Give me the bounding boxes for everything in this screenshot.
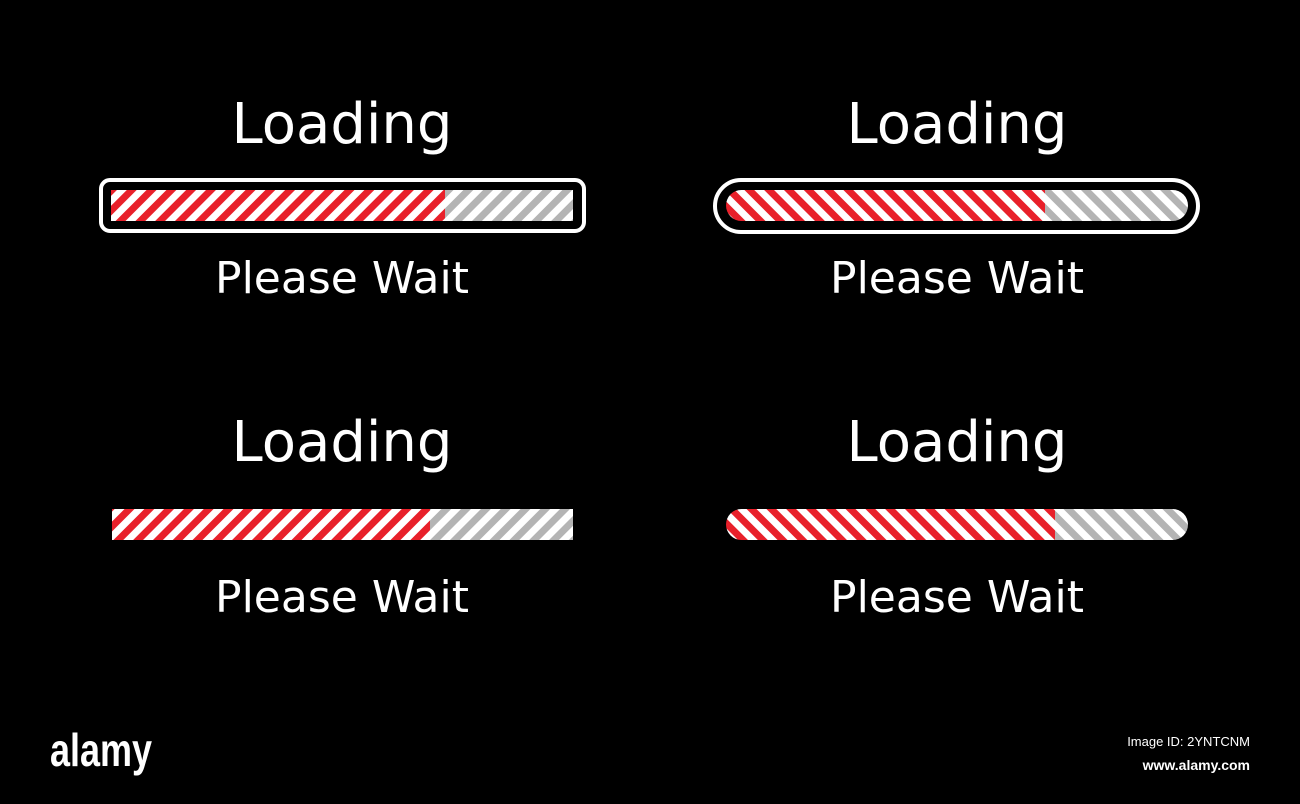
heading: loading top-left: Loading (232, 92, 452, 157)
footer id text: www.alamy.com (1142, 757, 1250, 773)
text: please wait bottom-right: Please Wait (830, 572, 1084, 623)
heading: loading bottom-right: Loading (847, 410, 1067, 475)
text: please wait top-left: Please Wait (215, 253, 469, 304)
panel: bottom-left loader (112, 410, 573, 623)
text: please wait top-right: Please Wait (830, 253, 1084, 304)
panel: top-left loader (101, 92, 584, 304)
progress bar: framed square (101, 180, 584, 231)
panel: top-right loader (715, 92, 1198, 304)
progress bar: framed rounded (715, 180, 1198, 232)
progress bar: plain square (112, 509, 573, 540)
footer id text: Image ID: 2YNTCNM (1127, 734, 1250, 749)
text: please wait bottom-left: Please Wait (215, 572, 469, 623)
heading: loading top-right: Loading (847, 92, 1067, 157)
heading: loading bottom-left: Loading (232, 410, 452, 475)
progress bar: plain rounded (726, 509, 1188, 540)
panel: bottom-right loader (726, 410, 1188, 623)
footer id text (1127, 734, 1250, 773)
footer logo: alamy (50, 724, 152, 776)
